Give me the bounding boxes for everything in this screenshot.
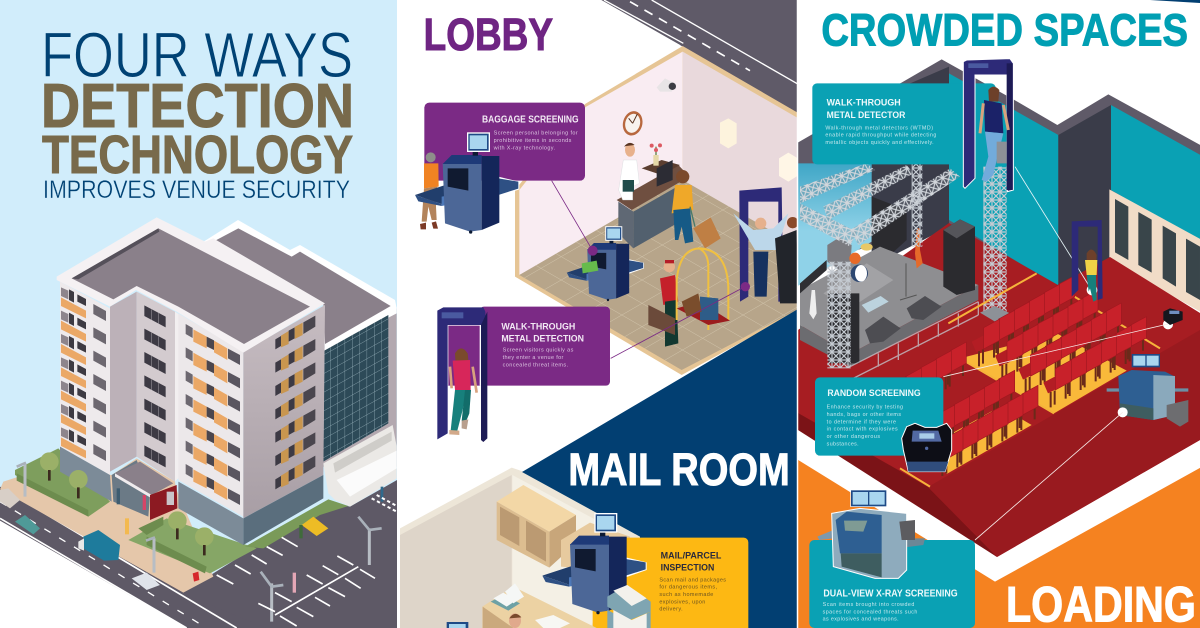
stage — [800, 247, 978, 354]
callout: walk-through metal detector: metallic objects quickly and effectively. — [825, 140, 934, 146]
street — [600, 0, 800, 115]
stage railing — [850, 302, 978, 380]
callout: random screening: to determine if they were — [827, 419, 896, 425]
callout: mail/parcel inspection: explosives, upon — [659, 599, 705, 605]
mail room heading: MAIL ROOM — [568, 444, 790, 495]
icon: large metal detector with woman — [963, 59, 1013, 192]
callout: baggage screening: prohibitive items in seconds — [494, 138, 572, 144]
callout: mail/parcel inspection: for dangerous items, — [659, 585, 717, 591]
callout: walk-through metal detection: Screen visitors quickly as — [503, 348, 574, 354]
scanner in lobby — [567, 227, 644, 301]
callout: baggage screening: with X-ray technology. — [493, 145, 555, 151]
panel: lobby and mail room — [397, 0, 800, 628]
cabinets — [497, 485, 630, 573]
callout: random screening: in contact with explosives — [827, 427, 898, 433]
clock — [622, 111, 643, 136]
callout: walk-through metal detector: enable rapid throughput while detecting — [825, 133, 936, 139]
doors — [1109, 189, 1200, 313]
pointer lines — [943, 324, 1168, 540]
main tower walls — [60, 282, 110, 475]
callout: baggage screening: Screen personal belonging for — [494, 131, 578, 137]
receptionist — [619, 143, 639, 200]
orange loading area — [797, 459, 1200, 628]
callout: dual-view x-ray screening: as explosives and weapons. — [823, 617, 899, 623]
title: FOUR WAYS — [41, 19, 353, 91]
icon: dual-view x-ray scanner — [817, 490, 925, 578]
callout: random screening: hands, bags or other items — [827, 412, 901, 418]
callout: baggage screening: BAGGAGE SCREENING — [482, 115, 579, 126]
people — [117, 488, 120, 504]
panel dividers — [796, 0, 798, 628]
parking lines — [217, 537, 375, 626]
red carpet — [798, 223, 1200, 557]
lobby heading: LOBBY — [424, 9, 553, 60]
callout: random screening: or other dangerous — [827, 434, 880, 440]
callout: walk-through metal detection: METAL DETECTION — [501, 334, 584, 344]
trusses — [800, 163, 960, 247]
icon: trace detector — [902, 423, 952, 472]
trees, lamps — [40, 452, 214, 546]
entrance canopy — [112, 460, 150, 517]
reception desk — [617, 165, 689, 210]
panel: crowded spaces — [797, 0, 1200, 628]
callout: walk-through metal detector: Walk-through metal detectors (WTMD) — [825, 125, 933, 131]
luggage cart — [677, 248, 728, 330]
icon: mail scanner — [542, 514, 651, 628]
callout: walk-through metal detector — [812, 83, 996, 164]
callout: walk-through metal detector: METAL DETECTOR — [827, 110, 906, 120]
callout: walk-through metal detection — [480, 307, 610, 386]
small metal detector with visitor — [1072, 220, 1103, 302]
callout: baggage screening — [424, 103, 585, 181]
venue walls — [797, 59, 1200, 287]
guest with luggage — [672, 170, 721, 248]
callout: random screening: Enhance security by testing — [827, 405, 903, 411]
callout: mail/parcel inspection: MAIL/PARCEL — [661, 550, 722, 560]
title: IMPROVES VENUE SECURITY — [43, 176, 350, 204]
lobby metal detector with guard — [733, 187, 798, 303]
callout: dual-view x-ray screening: DUAL-VIEW X-RAY SCREENING — [823, 589, 958, 600]
title — [42, 32, 353, 198]
yellow aisle stripes — [948, 273, 1037, 323]
mail room wall — [400, 468, 643, 628]
wall lights — [720, 118, 737, 148]
back building — [203, 220, 397, 355]
callout: walk-through metal detector: WALK-THROUGH — [827, 98, 901, 108]
callout: dual-view x-ray screening: spaces for concealed threats such — [823, 609, 917, 615]
seating — [863, 276, 1160, 487]
title: TECHNOLOGY — [42, 125, 353, 185]
lobby room — [515, 46, 800, 375]
stage back speaker — [872, 197, 907, 257]
callout: mail/parcel inspection: such as homemade — [659, 592, 713, 598]
camera — [657, 78, 676, 92]
callout: random screening: substances. — [827, 441, 859, 447]
speakers — [943, 219, 975, 295]
navy mail room background — [522, 309, 797, 628]
desk and mail sorter — [447, 583, 597, 628]
callout: random screening: RANDOM SCREENING — [827, 388, 921, 398]
icon: walk-through metal detector with woman — [437, 307, 487, 442]
callout: dual-view x-ray screening: Scan items brought into crowded — [823, 602, 914, 608]
callout: mail/parcel inspection: delivery. — [659, 607, 683, 613]
panel: headline and building — [0, 0, 400, 628]
callout: random screening — [815, 377, 943, 456]
callout: mail/parcel inspection — [593, 538, 748, 628]
callout: mail/parcel inspection: INSPECTION — [661, 563, 715, 573]
building illustration — [0, 217, 400, 628]
small dual-view scanner — [1107, 354, 1188, 427]
main roof — [57, 217, 325, 353]
bellhop — [648, 260, 678, 347]
callout: walk-through metal detection: concealed threat items. — [503, 362, 568, 368]
vehicles — [83, 530, 120, 561]
callout: mail/parcel inspection: Scan mail and packages — [659, 577, 726, 583]
tall truss tower — [980, 167, 1010, 322]
callout: walk-through metal detection: WALK-THROUGH — [501, 321, 576, 331]
drums and instruments — [851, 265, 868, 282]
random screening device on floor — [1163, 308, 1183, 325]
title: DETECTION — [41, 72, 354, 141]
callout: walk-through metal detection: they enter a venue for — [503, 355, 564, 361]
icon: baggage scanner with passenger — [415, 133, 519, 234]
pointer line — [1015, 167, 1092, 290]
callout: dual-view x-ray screening — [809, 540, 975, 628]
pointer lines — [552, 181, 745, 358]
